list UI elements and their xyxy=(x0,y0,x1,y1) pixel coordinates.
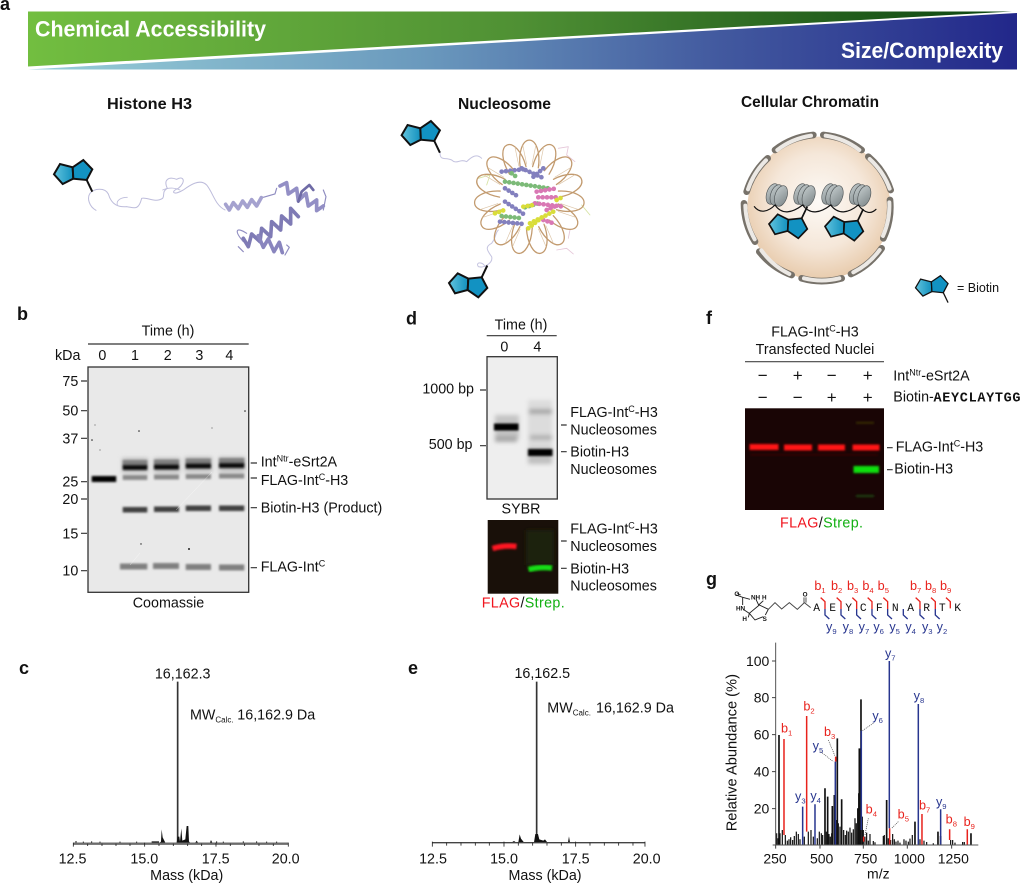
mass spectrum c: 15.0 xyxy=(130,851,158,867)
mass spectrum e: MW xyxy=(547,700,573,716)
band labels d upper: Nucleosomes xyxy=(570,422,657,438)
treatment labels: AEYCLAYTGG xyxy=(934,392,1020,407)
biotinylated peptide sequence: y xyxy=(859,620,865,634)
biotinylated peptide sequence: b xyxy=(925,579,932,593)
band labels b: Biotin-H3 (Product) xyxy=(261,500,382,516)
biotinylated peptide sequence: 3 xyxy=(928,627,933,636)
band labels b: C xyxy=(319,559,326,569)
MS/MS spectrum chart: 80 xyxy=(754,690,770,706)
biotinylated peptide sequence: A xyxy=(907,603,914,615)
MS/MS spectrum chart: 4 xyxy=(873,809,878,818)
MS/MS spectrum chart: b xyxy=(946,812,953,826)
MS/MS spectrum chart: y xyxy=(914,689,920,703)
plus minus treatment rows: − xyxy=(758,366,768,385)
MS/MS spectrum chart: 2 xyxy=(810,707,815,716)
MS/MS spectrum chart: m/z xyxy=(867,865,890,881)
mass spectrum e xyxy=(419,666,674,884)
band labels b: C xyxy=(319,472,326,482)
biotinylated peptide sequence: E xyxy=(829,603,836,615)
mass spectrum e: 20.0 xyxy=(633,851,661,867)
mass spectrum e: 16,162.9 Da xyxy=(596,700,674,716)
MS/MS spectrum chart: 7 xyxy=(891,653,896,662)
biotinylated peptide sequence: 9 xyxy=(832,627,837,636)
bp markers: 1000 bp xyxy=(422,381,474,397)
biotinylated peptide sequence: 9 xyxy=(947,586,951,595)
panel b header labels: kDa xyxy=(55,348,80,364)
plus minus treatment rows: + xyxy=(827,388,837,407)
panel b header labels: 0 xyxy=(98,348,106,364)
MS/MS spectrum chart: b xyxy=(824,725,831,739)
biotinylated peptide sequence: 3 xyxy=(854,586,858,595)
panel b header labels: Time (h) xyxy=(142,324,194,340)
biotinylated peptide sequence: y xyxy=(873,620,880,634)
panel letter b: b xyxy=(17,304,28,324)
MS/MS spectrum chart: 1 xyxy=(788,729,792,738)
SYBR gel xyxy=(487,357,557,499)
biotinylated peptide sequence: y xyxy=(922,620,928,634)
MS/MS spectrum chart: 3 xyxy=(831,732,835,741)
MS/MS spectrum chart: b xyxy=(803,700,810,714)
MS/MS spectrum chart: 1250 xyxy=(938,850,969,866)
mass spectrum c: Mass (kDa) xyxy=(150,868,223,884)
gradient banner xyxy=(28,12,1017,70)
biotinylated peptide sequence: 2 xyxy=(943,627,947,636)
biotinylated peptide sequence: y xyxy=(889,620,896,634)
biotinylated peptide sequence: 2 xyxy=(838,586,842,595)
band labels b: FLAG-Int xyxy=(261,473,319,489)
MS/MS spectrum chart: b xyxy=(964,815,971,829)
mass spectrum c: MW xyxy=(190,707,215,723)
MS/MS spectrum chart: 5 xyxy=(819,746,823,755)
plus minus treatment rows: − xyxy=(793,388,803,407)
MS/MS spectrum chart: 100 xyxy=(746,653,770,669)
panel d header labels xyxy=(487,317,557,356)
biotinylated peptide sequence: C xyxy=(860,603,867,615)
biotinylated peptide sequence: F xyxy=(876,603,883,615)
MS/MS spectrum chart: b xyxy=(898,807,905,821)
mass spectrum e: Mass (kDa) xyxy=(508,868,582,884)
panel b header labels: 4 xyxy=(225,348,233,364)
band labels d upper: Nucleosomes xyxy=(570,462,657,478)
band labels f: C xyxy=(954,439,961,449)
plus minus treatment rows: + xyxy=(793,366,803,385)
MS/MS spectrum chart: 9 xyxy=(942,802,947,811)
gradient banner: Chemical Accessibility xyxy=(35,16,267,42)
biotinylated peptide sequence: y xyxy=(937,620,943,634)
kDa markers: 37 xyxy=(62,431,78,447)
mass spectrum e: 16,162.5 xyxy=(514,666,570,682)
heading: Cellular Chromatin: Cellular Chromatin xyxy=(741,94,879,111)
treatment labels: Biotin- xyxy=(893,390,934,406)
band labels f xyxy=(887,439,983,477)
MS/MS spectrum chart: y xyxy=(885,646,891,660)
panel letter f: f xyxy=(706,308,713,328)
kDa markers: 25 xyxy=(62,475,78,491)
caption FLAG/Strep f: FLAG/Strep. xyxy=(780,515,863,531)
band labels d lower: FLAG-Int xyxy=(570,522,628,538)
biotinylated peptide sequence: y xyxy=(843,620,849,634)
kDa markers: 15 xyxy=(62,526,78,542)
heading: Nucleosome: Nucleosome xyxy=(458,96,551,113)
MS/MS spectrum chart: y xyxy=(813,739,819,753)
band labels d lower: Nucleosomes xyxy=(570,579,657,595)
mass spectrum c: 16,162.9 Da xyxy=(237,707,315,723)
MS/MS spectrum chart: 4 xyxy=(817,796,822,805)
band labels d lower: Biotin-H3 xyxy=(570,561,629,577)
band labels d lower: Nucleosomes xyxy=(570,539,657,555)
biotinylated peptide sequence: HN xyxy=(736,606,746,613)
band labels d lower: -H3 xyxy=(635,522,658,538)
caption SYBR: SYBR xyxy=(502,501,540,517)
MS/MS spectrum chart: 3 xyxy=(801,797,806,806)
MS/MS spectrum chart: Relative Abundance (%) xyxy=(725,674,741,831)
MS/MS spectrum chart: 20 xyxy=(754,801,770,817)
treatment labels: -eSrt2A xyxy=(921,368,970,384)
mass spectrum c xyxy=(59,666,315,884)
gradient banner: Size/Complexity xyxy=(841,38,1003,63)
biotinylated peptide sequence: b xyxy=(940,579,947,593)
MS/MS spectrum chart: b xyxy=(781,722,788,736)
MS/MS spectrum chart: 500 xyxy=(810,850,834,866)
panel d header labels: Time (h) xyxy=(495,317,547,333)
band labels b xyxy=(251,454,382,576)
MS/MS spectrum chart: b xyxy=(919,798,926,812)
MS/MS spectrum chart: 1000 xyxy=(894,850,925,866)
biotinylated peptide sequence: b xyxy=(878,579,885,593)
treatment labels: Int xyxy=(893,368,909,384)
biotinylated peptide sequence: b xyxy=(847,579,854,593)
biotinylated peptide sequence: b xyxy=(910,579,917,593)
MS/MS spectrum chart: 750 xyxy=(854,850,878,866)
panel b header labels: 2 xyxy=(164,348,172,364)
biotinylated peptide sequence: S xyxy=(763,616,767,623)
caption Coomassie: Coomassie xyxy=(133,596,204,612)
biotinylated peptide sequence: 5 xyxy=(885,586,889,595)
plus minus treatment rows: + xyxy=(863,388,873,407)
nucleosome structure xyxy=(440,140,590,267)
plus minus treatment rows: − xyxy=(758,388,768,407)
panel letter g: g xyxy=(706,569,717,589)
kDa markers: 50 xyxy=(62,404,78,420)
biotinylated peptide sequence: H xyxy=(762,594,767,601)
band labels f: Biotin-H3 xyxy=(894,461,953,477)
band labels b: -eSrt2A xyxy=(289,455,338,471)
band labels d upper: -H3 xyxy=(635,405,658,421)
biotinylated peptide sequence xyxy=(734,579,961,636)
panel f header: -H3 xyxy=(836,324,859,340)
band labels b: -H3 xyxy=(325,473,348,489)
mass spectrum e: 12.5 xyxy=(419,851,447,867)
panel f header: C xyxy=(829,323,836,333)
biotinylated peptide sequence: 5 xyxy=(896,627,900,636)
panel b header labels xyxy=(55,324,249,364)
plus minus treatment rows: + xyxy=(863,366,873,385)
biotinylated peptide sequence: b xyxy=(831,579,838,593)
band labels b: FLAG-Int xyxy=(261,560,319,576)
MS/MS spectrum chart: 8 xyxy=(920,696,924,705)
biotinylated peptide sequence: O xyxy=(803,592,808,599)
band labels f: FLAG-Int xyxy=(896,440,954,456)
MS/MS spectrum chart: 9 xyxy=(971,822,975,831)
Coomassie gel xyxy=(88,367,249,592)
icon: biotin on histone xyxy=(54,160,92,192)
biotinylated peptide sequence: 4 xyxy=(912,627,917,636)
band labels d upper: FLAG-Int xyxy=(570,405,628,421)
treatment labels: Ntr xyxy=(909,367,921,377)
panel f header: FLAG-Int xyxy=(771,324,829,340)
MS/MS spectrum chart: y xyxy=(936,795,942,809)
MS/MS spectrum chart: y xyxy=(795,790,801,804)
biotinylated peptide sequence: 6 xyxy=(880,627,884,636)
panel f header: Transfected Nuclei xyxy=(756,342,874,358)
MS/MS spectrum chart: 6 xyxy=(879,716,883,725)
biotinylated peptide sequence: 1 xyxy=(821,586,826,595)
mass spectrum c: Calc. xyxy=(215,715,234,724)
MS/MS spectrum chart: 8 xyxy=(953,819,957,828)
kDa markers: 75 xyxy=(62,374,78,390)
biotinylated peptide sequence: H xyxy=(742,616,747,623)
band labels d upper: C xyxy=(628,404,635,414)
MS/MS spectrum chart: b xyxy=(866,802,873,816)
biotinylated peptide sequence: 7 xyxy=(865,627,869,636)
biotinylated peptide sequence: 7 xyxy=(917,586,921,595)
biotinylated peptide sequence: b xyxy=(814,579,821,593)
panel f header xyxy=(745,323,884,362)
mass spectrum c: 12.5 xyxy=(59,851,86,867)
biotinylated peptide sequence: NH xyxy=(751,594,761,601)
FLAG/Strep blot f xyxy=(745,408,884,510)
mass spectrum c: 20.0 xyxy=(272,851,300,867)
biotinylated peptide sequence: y xyxy=(826,620,832,634)
panel d header labels: 0 xyxy=(500,340,508,356)
band labels b: Ntr xyxy=(277,454,289,464)
panel b header labels: 1 xyxy=(131,348,139,364)
caption FLAG/Strep d: FLAG/Strep. xyxy=(482,595,565,611)
MS/MS spectrum chart xyxy=(725,643,978,881)
plus minus treatment rows: − xyxy=(827,366,837,385)
treatment labels xyxy=(893,367,1020,407)
biotinylated peptide sequence: O xyxy=(734,591,739,598)
icon: biotin bottom of nucleosome xyxy=(449,266,487,297)
biotinylated peptide sequence: 8 xyxy=(849,627,853,636)
panel letter c: c xyxy=(19,658,29,678)
band labels f: -H3 xyxy=(960,440,983,456)
histone H3 ribbon structure xyxy=(89,178,326,255)
biotinylated peptide sequence: 4 xyxy=(869,586,874,595)
band labels d upper: Biotin-H3 xyxy=(570,445,629,461)
MS/MS spectrum chart: 250 xyxy=(763,850,787,866)
band labels d lower: C xyxy=(628,521,635,531)
panel d header labels: 4 xyxy=(533,340,541,356)
kDa markers: 20 xyxy=(62,492,78,508)
biotinylated peptide sequence: A xyxy=(813,603,820,615)
MS/MS spectrum chart: y xyxy=(810,789,817,803)
biotinylated peptide sequence: K xyxy=(954,603,961,615)
MS/MS spectrum chart: 40 xyxy=(754,764,770,780)
MS/MS spectrum chart: 5 xyxy=(905,814,909,823)
icon: biotin left in nucleus xyxy=(769,207,807,238)
mass spectrum e: Calc. xyxy=(573,708,591,717)
mass spectrum e: 15.0 xyxy=(490,851,518,867)
biotinylated peptide sequence: Y xyxy=(845,603,852,615)
bp markers: 500 bp xyxy=(429,437,473,453)
biotinylated peptide sequence: N xyxy=(892,603,899,615)
FLAG/Strep blot d xyxy=(488,520,558,594)
panel letter d: d xyxy=(406,308,417,328)
bp markers xyxy=(422,381,486,453)
cell nucleus with chromatin xyxy=(744,135,891,281)
MS/MS spectrum chart: 7 xyxy=(926,805,930,814)
biotinylated peptide sequence: b xyxy=(862,579,869,593)
biotinylated peptide sequence: T xyxy=(939,603,946,615)
mass spectrum e: 17.5 xyxy=(562,851,590,867)
heading: Histone H3: Histone H3 xyxy=(107,96,192,113)
legend: biotin xyxy=(916,276,999,303)
MS/MS spectrum chart: 60 xyxy=(754,727,770,743)
biotinylated peptide sequence: y xyxy=(905,620,912,634)
biotinylated peptide sequence: 8 xyxy=(932,586,936,595)
panel b header labels: 3 xyxy=(195,348,203,364)
mass spectrum c: 16,162.3 xyxy=(155,666,211,682)
band labels d lower xyxy=(561,521,658,595)
panel letter e: e xyxy=(408,658,418,678)
plus minus treatment rows xyxy=(758,366,873,407)
band labels b: Int xyxy=(261,455,277,471)
kDa markers xyxy=(62,374,87,580)
biotinylated peptide sequence: R xyxy=(923,603,930,615)
band labels d upper xyxy=(561,404,658,478)
icon: biotin top of nucleosome xyxy=(402,121,440,153)
kDa markers: 10 xyxy=(62,564,78,580)
legend: biotin: = Biotin xyxy=(957,281,999,295)
mass spectrum c: 17.5 xyxy=(202,851,230,867)
MS/MS spectrum chart: y xyxy=(872,709,879,723)
icon: biotin right in nucleus xyxy=(825,209,863,241)
